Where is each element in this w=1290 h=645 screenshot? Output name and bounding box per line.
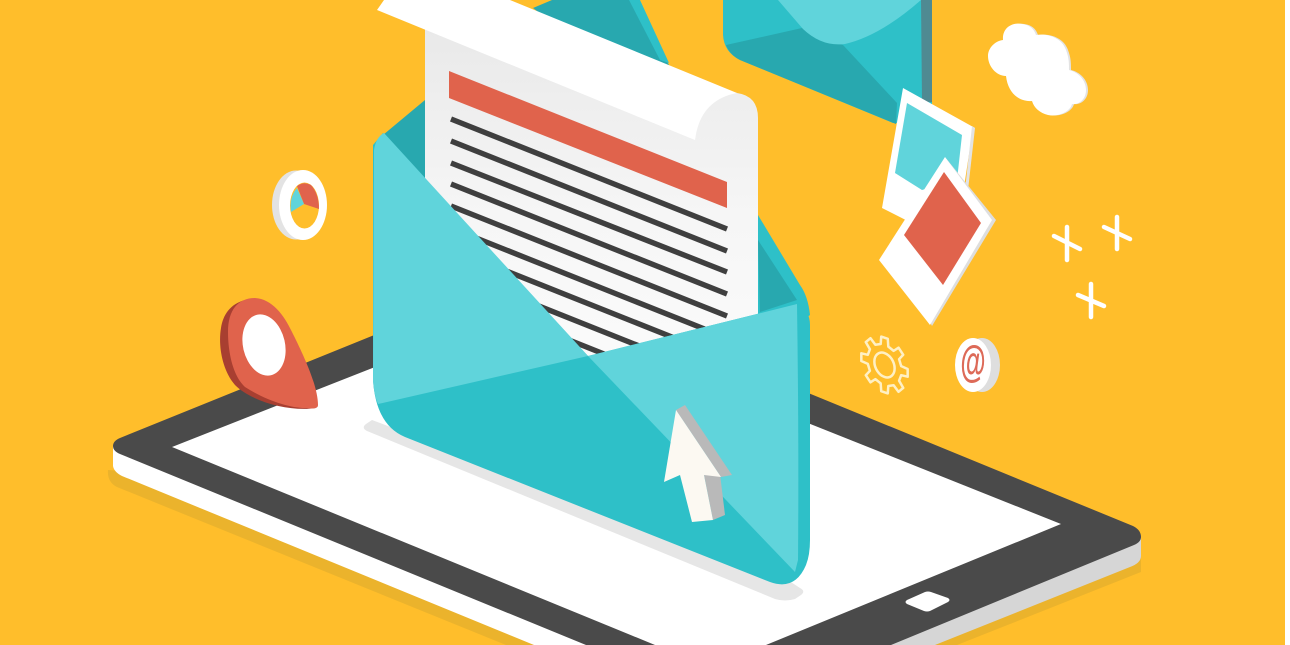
small envelope right edge bbox=[921, 0, 932, 102]
at-sign coin bbox=[955, 337, 1000, 392]
pie yellow slice bbox=[290, 182, 319, 228]
cursor side bbox=[676, 405, 732, 477]
photo cards bbox=[879, 88, 996, 326]
pie red slice bbox=[297, 183, 319, 209]
front photo side bbox=[930, 157, 996, 326]
envelope right flap bbox=[588, 304, 798, 572]
letter headline bar bbox=[449, 71, 727, 208]
at symbol: @ bbox=[960, 337, 986, 386]
front photo image bbox=[904, 172, 981, 285]
pin hole bbox=[237, 310, 291, 380]
tablet home button bbox=[906, 592, 950, 612]
cloud bbox=[988, 24, 1088, 115]
back photo image bbox=[895, 103, 962, 190]
envelope front bbox=[373, 133, 810, 584]
tablet shadow bbox=[108, 470, 1141, 645]
small envelope flap bbox=[778, 0, 921, 44]
coin face bbox=[279, 170, 327, 240]
tablet bezel bbox=[113, 277, 1141, 645]
tablet screen bbox=[172, 309, 1061, 645]
letter bbox=[377, 0, 758, 403]
envelope back flap bbox=[383, 0, 810, 330]
pie chart coin bbox=[272, 170, 327, 240]
pin side bbox=[220, 300, 316, 409]
back photo bbox=[882, 88, 975, 245]
small envelope body bbox=[723, 0, 932, 123]
at coin face bbox=[955, 338, 991, 392]
letter text lines bbox=[451, 119, 727, 403]
cursor face bbox=[664, 410, 721, 522]
small envelope lower fold bbox=[726, 28, 897, 124]
at coin edge bbox=[964, 338, 1000, 392]
letter curled top bbox=[377, 0, 737, 140]
envelope left flap bbox=[373, 133, 588, 404]
plus sparkles bbox=[1054, 217, 1130, 317]
tablet side bbox=[113, 445, 640, 645]
envelope shadow bbox=[364, 420, 803, 600]
pin face bbox=[228, 298, 318, 408]
letter page bbox=[425, 25, 758, 356]
tablet bbox=[108, 277, 1141, 645]
cloud rim bbox=[990, 24, 1088, 115]
cursor arrow bbox=[664, 405, 732, 522]
envelope body bbox=[373, 133, 810, 584]
gear icon bbox=[861, 330, 908, 400]
cloud body bbox=[988, 24, 1086, 115]
small envelope, top right bbox=[723, 0, 932, 124]
front photo bbox=[879, 157, 992, 325]
map pin bbox=[220, 298, 318, 409]
pie blue slice bbox=[291, 188, 304, 212]
coin edge bbox=[272, 170, 320, 240]
